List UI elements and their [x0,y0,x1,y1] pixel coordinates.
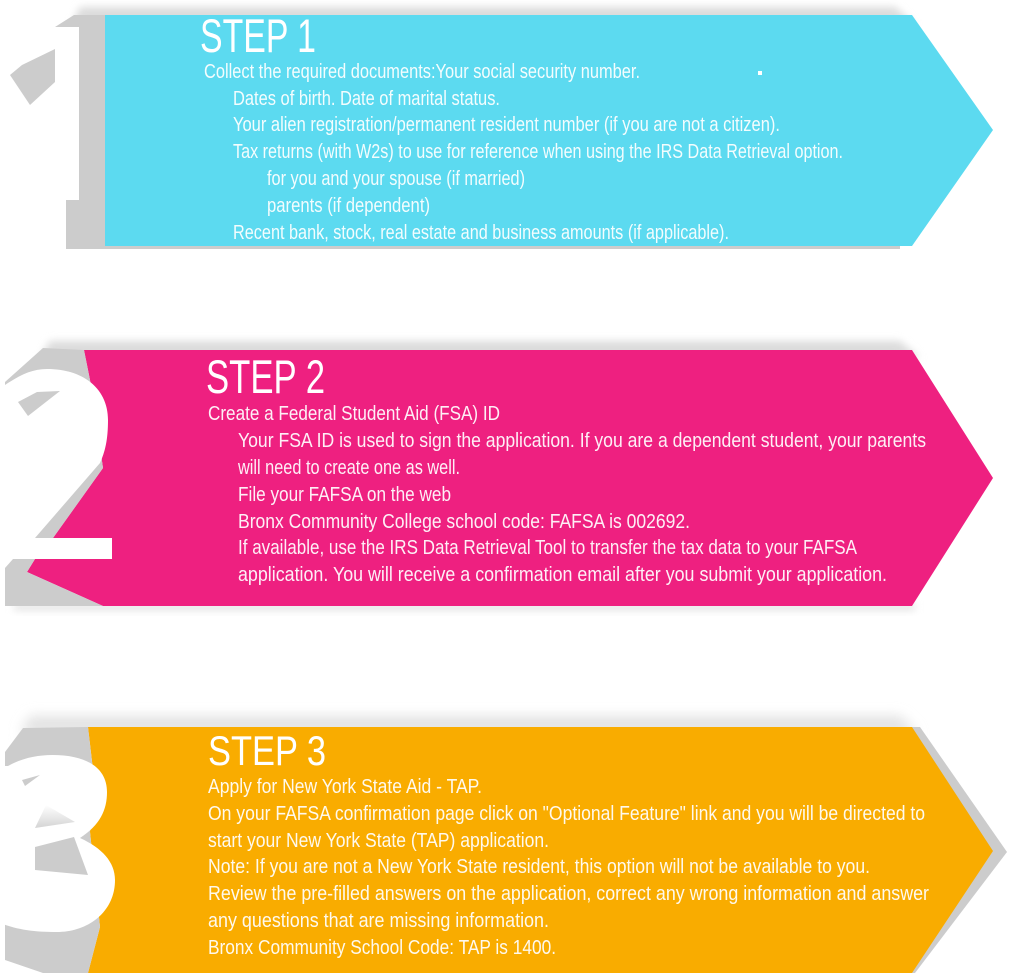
heading: step 3: STEP 3 [208,727,326,774]
text block: step 2 [208,403,926,586]
arrow banner: pink [27,350,993,606]
number 2 with grey extrusion [0,348,112,606]
text block: step 2: will need to create one as well. [237,457,460,479]
number 3 with grey extrusion [0,727,115,973]
arrow banner: orange [88,727,993,973]
text block: step 2: Bronx Community College school code: FAFSA is 002692. [238,511,690,533]
text block: step 1: Tax returns (with W2s) to use for reference when using the IRS Data Retrieval option. [233,141,843,163]
text block: step 1: Your alien registration/permanent resident number (if you are not a citizen). [233,114,780,136]
text block: step 3 [208,776,929,959]
text block: step 3: Note: If you are not a New York State resident, this option will not be available to you. [208,856,870,878]
text block: step 1: Recent bank, stock, real estate and business amounts (if applicable). [233,222,729,244]
text block: step 2: Your FSA ID is used to sign the application. If you are a dependent student, your parents [238,430,926,452]
text block: step 2: application. You will receive a confirmation email after you submit your application. [238,564,887,586]
heading: step 2: STEP 2 [206,350,325,403]
text block: step 1 [204,61,843,244]
arrow banner: blue [105,15,993,246]
panel: step 2 [0,341,993,610]
text block: step 1: Dates of birth. Date of marital status. [233,88,500,110]
number 1 with grey extrusion [10,15,105,249]
text block: step 1: for you and your spouse (if married) [267,168,525,190]
text block: step 1: Collect the required documents:Your social security number. [204,61,640,83]
heading: step 1: STEP 1 [200,9,316,62]
text block: step 2: File your FAFSA on the web [238,484,451,506]
text block: step 2: If available, use the IRS Data Retrieval Tool to transfer the tax data to your FAFSA [238,537,858,559]
text block: step 3: Apply for New York State Aid - TAP. [208,776,482,798]
text block: step 3: On your FAFSA confirmation page click on "Optional Feature" link and you will be directed to [208,803,925,825]
text block: step 3: Bronx Community School Code: TAP is 1400. [208,937,556,959]
text block: step 3: Review the pre-filled answers on the application, correct any wrong information and answer [208,883,929,905]
panel: step 3 [0,716,1007,973]
dot [758,71,762,75]
text block: step 3: any questions that are missing information. [208,910,549,932]
text block: step 2: Create a Federal Student Aid (FSA) ID [208,403,500,425]
text block: step 3: start your New York State (TAP) application. [208,830,549,852]
text block: step 1: parents (if dependent) [267,195,430,217]
panel: step 1 [10,7,993,249]
